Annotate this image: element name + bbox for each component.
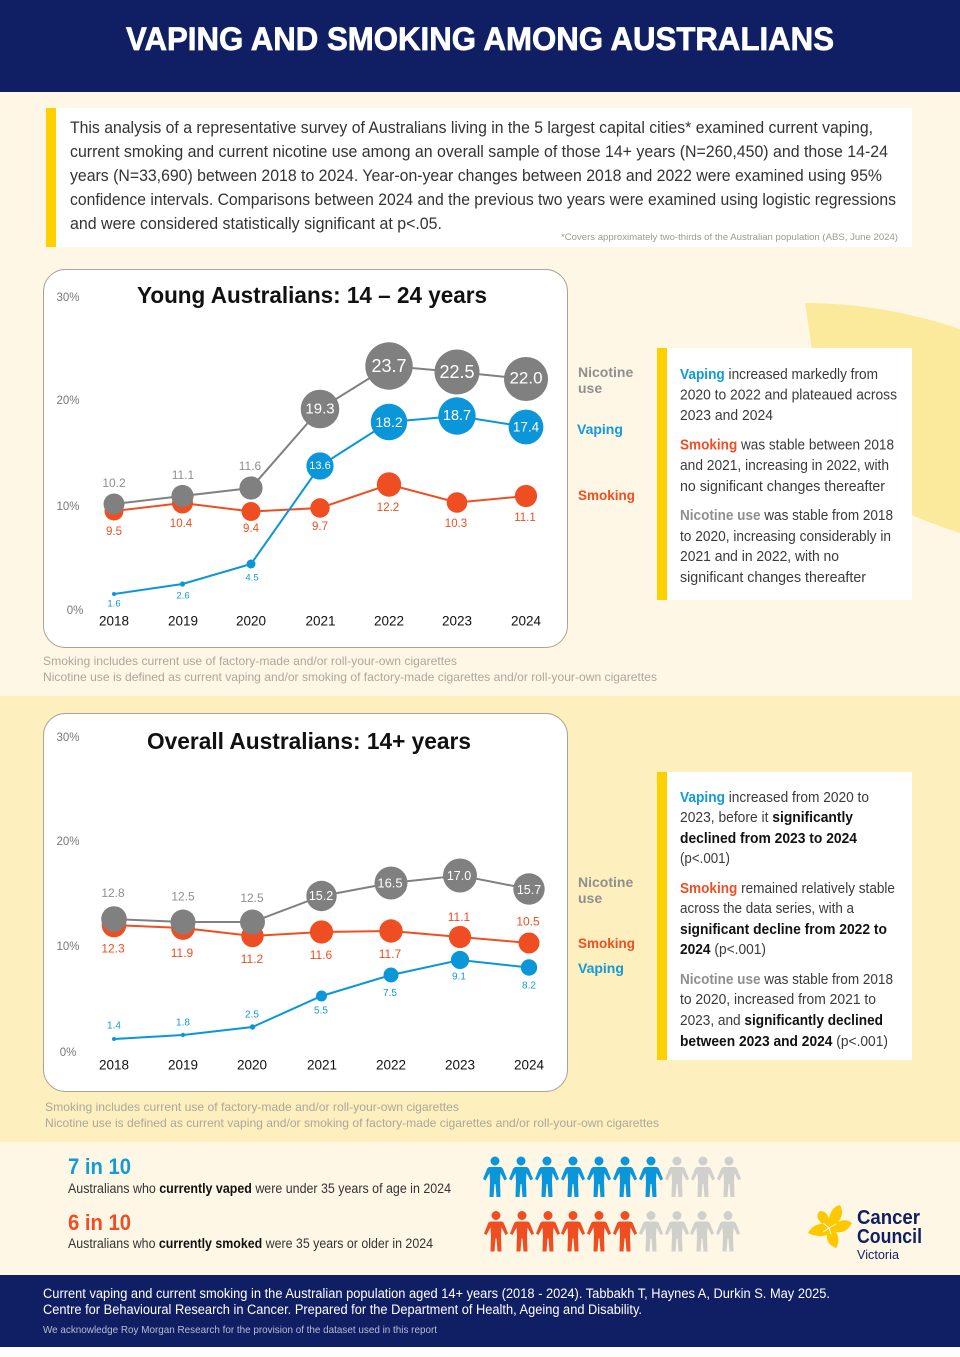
smoking values: 11.9 <box>171 946 194 960</box>
smoking values: 10.4 <box>170 518 193 530</box>
nicotine finding: between 2023 and 2024 (p<.001) <box>680 1034 888 1050</box>
y axis labels: 10% <box>56 941 80 953</box>
nicotine values: 11.1 <box>172 468 195 482</box>
nicotine series <box>104 342 548 514</box>
y axis labels: 0% <box>67 605 83 617</box>
smoking values: 9.7 <box>312 521 328 533</box>
panel: introduction <box>46 108 912 247</box>
smoking values <box>106 502 536 538</box>
nicotine values: 12.5 <box>171 890 195 904</box>
vaping series <box>112 951 537 1041</box>
smoking finding: Smoking remained relatively stable <box>680 881 895 897</box>
nicotine values: 22.5 <box>439 362 475 382</box>
nicotine values: 23.7 <box>371 356 407 376</box>
nicotine finding <box>680 972 893 1050</box>
vaping values: 18.2 <box>375 414 403 430</box>
citation: Centre for Behavioural Research in Cancer. Prepared for the Department of Health, Ageing and Disability. <box>43 1302 642 1317</box>
title: VAPING AND SMOKING AMONG AUSTRALIANS <box>126 21 834 57</box>
panel: overall findings <box>657 772 912 1060</box>
x axis years: 2022 <box>374 614 404 628</box>
y axis labels <box>56 732 80 1059</box>
smoking values: 12.3 <box>101 942 125 956</box>
panel: young findings <box>657 348 912 600</box>
smoking finding: 2024 (p<.001) <box>680 942 766 958</box>
chart: young Australians <box>44 270 568 648</box>
icon row: smoking people <box>484 1211 740 1252</box>
vaping finding: 2023, before it significantly <box>680 810 853 826</box>
y axis labels <box>56 292 83 617</box>
nicotine values: 19.3 <box>305 400 335 418</box>
y axis labels: 20% <box>56 836 80 848</box>
logo: Cancer Council Victoria <box>808 1205 922 1262</box>
x axis years: 2023 <box>442 614 472 628</box>
smoking finding: and 2021, increasing in 2022, with <box>680 458 889 474</box>
smoking finding: significant decline from 2022 to <box>680 922 887 938</box>
smoking finding: Smoking was stable between 2018 <box>680 438 894 454</box>
nicotine values <box>101 869 541 905</box>
intro text: current smoking and current nicotine use among an overall sample of those 14+ years (N=260,450) and those 14-24 <box>70 143 888 161</box>
y axis labels: 30% <box>56 292 80 304</box>
x axis years: 2018 <box>99 1058 129 1072</box>
smoking series <box>104 472 537 521</box>
citation: Current vaping and current smoking in the Australian population aged 14+ years (2018 - 2024). Tabbakh T, Haynes A, Durkin S. May 2025. <box>43 1286 830 1301</box>
vaping finding <box>680 367 897 424</box>
nicotine finding <box>680 508 893 586</box>
x axis years: 2020 <box>236 614 266 628</box>
x axis years: 2021 <box>307 1058 337 1072</box>
nicotine finding: to 2020, increased from 2021 to <box>680 992 876 1008</box>
smoking values: 9.4 <box>243 523 260 535</box>
x axis years: 2023 <box>445 1058 475 1072</box>
definitions note: young chart: Nicotine use is defined as current vaping and/or smoking of factory-made cigarettes and/or roll-your-own cigarettes <box>43 670 657 684</box>
nicotine finding: to 2020, increasing considerably in <box>680 529 891 545</box>
nicotine finding: significant changes thereafter <box>680 570 866 586</box>
legend: overall chart: Smoking <box>578 935 635 951</box>
vaping values: 1.4 <box>107 1020 121 1032</box>
smoking values <box>101 910 540 966</box>
nicotine values: 12.8 <box>101 886 125 900</box>
y axis labels: 30% <box>56 732 80 744</box>
nicotine values <box>102 356 543 490</box>
nicotine finding: Nicotine use was stable from 2018 <box>680 972 893 988</box>
x axis years: 2018 <box>99 614 129 628</box>
stat: 7 in 10 vaped: Australians who currently vaped were under 35 years of age in 2024 <box>68 1181 451 1196</box>
nicotine values: 11.6 <box>239 459 262 473</box>
nicotine values: 17.0 <box>447 869 471 883</box>
nicotine values: 15.7 <box>517 883 541 897</box>
logo wordmark: Council <box>857 1226 922 1248</box>
legend: young chart: Vaping <box>577 421 623 437</box>
vaping finding: 2020 to 2022 and plateaued across <box>680 388 897 404</box>
x axis years: 2019 <box>168 1058 198 1072</box>
definitions note: young chart <box>43 654 657 684</box>
x axis years: 2020 <box>237 1058 267 1072</box>
header banner <box>0 0 960 92</box>
vaping values: 2.6 <box>176 590 190 602</box>
stat: 6 in 10 smoked <box>68 1210 433 1251</box>
vaping values: 18.7 <box>443 408 471 424</box>
intro text: and were considered statistically significant at p<.05. <box>70 215 442 233</box>
legend: young chart: use <box>578 380 602 396</box>
nicotine values: 12.5 <box>240 891 264 905</box>
y axis labels: 10% <box>56 501 80 513</box>
vaping values <box>107 972 536 1032</box>
legend: young chart <box>577 364 635 503</box>
logo wordmark: Cancer <box>857 1207 920 1229</box>
decorative arc <box>805 303 960 533</box>
intro text <box>70 119 896 233</box>
vaping values <box>107 408 540 610</box>
legend: young chart: Smoking <box>578 487 635 503</box>
footer banner <box>0 1275 960 1347</box>
nicotine finding: Nicotine use was stable from 2018 <box>680 508 893 524</box>
stat: 7 in 10 vaped: 7 in 10 <box>68 1154 131 1179</box>
nicotine finding: 2023, and significantly declined <box>680 1013 883 1029</box>
vaping values: 9.1 <box>452 972 466 982</box>
nicotine values: 15.2 <box>309 889 333 903</box>
stat: 6 in 10 smoked: 6 in 10 <box>68 1210 131 1235</box>
legend: overall chart: use <box>578 890 602 906</box>
x axis years: 2019 <box>168 614 198 628</box>
smoking finding <box>680 881 895 958</box>
nicotine series <box>101 858 545 934</box>
smoking finding <box>680 438 894 495</box>
legend: overall chart: Nicotine <box>578 874 633 890</box>
logo wordmark <box>857 1207 922 1262</box>
chart title: Overall Australians: 14+ years <box>147 728 471 754</box>
smoking finding: no significant changes thereafter <box>680 479 885 495</box>
intro text: confidence intervals. Comparisons between 2024 and the previous two years were examined using logistic regressions <box>70 191 896 209</box>
vaping values: 7.5 <box>383 988 397 999</box>
smoking values: 11.7 <box>379 947 402 961</box>
smoking values: 11.2 <box>241 952 264 966</box>
legend: overall chart <box>578 874 635 976</box>
vaping finding: (p<.001) <box>680 851 730 867</box>
smoking values: 12.2 <box>377 502 399 514</box>
definitions note: young chart: Smoking includes current use of factory-made and/or roll-your-own cigarettes <box>43 654 457 668</box>
vaping values: 1.6 <box>107 598 121 610</box>
smoking values: 10.3 <box>445 518 467 530</box>
vaping values: 13.6 <box>309 460 331 472</box>
y axis labels: 0% <box>60 1047 76 1059</box>
x axis years <box>99 614 542 628</box>
x axis years: 2022 <box>376 1058 406 1072</box>
vaping finding <box>680 790 869 867</box>
logo wordmark: Victoria <box>857 1248 899 1262</box>
citation <box>43 1286 830 1317</box>
smoking values: 11.1 <box>448 910 471 924</box>
smoking series <box>102 913 539 954</box>
vaping values: 2.5 <box>245 1010 259 1020</box>
vaping values: 1.8 <box>176 1018 190 1028</box>
stat: 6 in 10 smoked: Australians who currently smoked were 35 years or older in 2024 <box>68 1236 433 1251</box>
x axis years: 2024 <box>514 1058 545 1072</box>
smoking values: 10.5 <box>516 914 540 928</box>
vaping series <box>112 397 543 596</box>
icon row: vaping people <box>483 1156 741 1197</box>
icon: daffodil <box>808 1205 852 1248</box>
footnote: *Covers approximately two-thirds of the Australian population (ABS, June 2024) <box>561 232 898 243</box>
y axis labels: 20% <box>56 395 80 407</box>
vaping finding: 2023 and 2024 <box>680 408 773 424</box>
vaping values: 17.4 <box>513 420 540 434</box>
intro text: years (N=33,690) between 2018 to 2024. Year-on-year changes between 2018 and 2022 were examined using 95% <box>70 167 882 185</box>
nicotine values: 22.0 <box>509 368 543 388</box>
x axis years <box>99 1058 545 1072</box>
intro text: This analysis of a representative survey of Australians living in the 5 largest capital cities* examined current vaping, <box>70 119 873 137</box>
nicotine finding: 2021 and in 2022, with no <box>680 549 839 565</box>
smoking finding: across the data series, with a <box>680 901 855 917</box>
vaping values: 5.5 <box>314 1006 328 1016</box>
x axis years: 2024 <box>511 614 542 628</box>
definitions note: overall chart: Nicotine use is defined as current vaping and/or smoking of factory-made cigarettes and/or roll-your-own cigarettes <box>45 1116 659 1130</box>
vaping finding: declined from 2023 to 2024 <box>680 831 857 847</box>
legend: young chart: Nicotine <box>578 364 633 380</box>
nicotine values: 10.2 <box>102 476 126 490</box>
smoking values: 11.6 <box>310 948 333 962</box>
nicotine values: 16.5 <box>377 876 403 890</box>
definitions note: overall chart <box>45 1100 659 1130</box>
smoking values: 9.5 <box>106 526 122 538</box>
chart: overall Australians <box>44 714 568 1092</box>
vaping values: 8.2 <box>522 980 536 992</box>
vaping finding: Vaping increased from 2020 to <box>680 790 869 806</box>
legend: overall chart: Vaping <box>578 960 624 976</box>
x axis years: 2021 <box>305 614 336 628</box>
smoking values: 11.1 <box>514 512 536 524</box>
vaping finding: Vaping increased markedly from <box>680 367 878 383</box>
acknowledgement: We acknowledge Roy Morgan Research for the provision of the dataset used in this report <box>43 1324 437 1336</box>
chart title: Young Australians: 14 – 24 years <box>137 282 487 308</box>
vaping values: 4.5 <box>245 572 259 584</box>
stat: 7 in 10 vaped <box>68 1154 451 1196</box>
definitions note: overall chart: Smoking includes current use of factory-made and/or roll-your-own cigarettes <box>45 1100 459 1114</box>
